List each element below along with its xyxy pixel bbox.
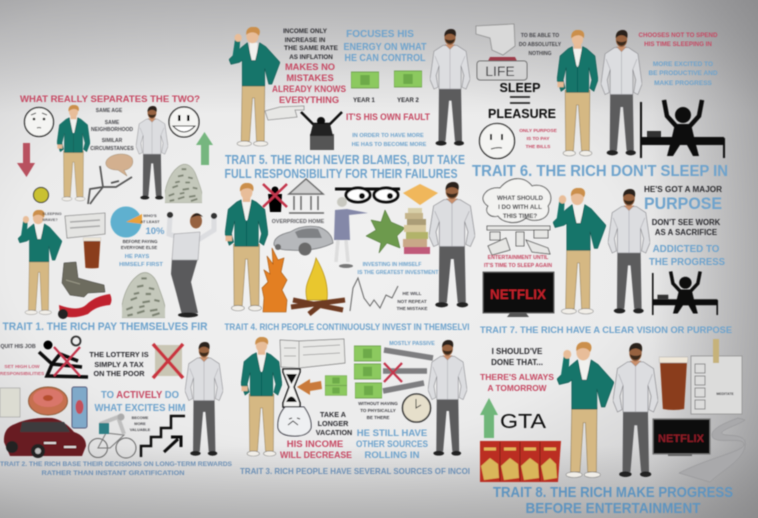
label: overpriced home: OVERPRICED HOME [272, 219, 325, 225]
figure: poor man thinking [557, 342, 614, 478]
text: more excited: BE PRODUCTIVE AND [648, 70, 718, 77]
icon: three bills [354, 346, 382, 398]
text: 10 percent: AT LEAST [140, 219, 160, 224]
heading: trait 4: TRAIT 4. RICH PEOPLE CONTINUOUSLY INVEST IN THEMSELVI [224, 322, 470, 333]
text: without having: BE THERE [367, 415, 389, 420]
text: addicted to the progress: ADDICTED TO [653, 244, 720, 255]
text: sleep equals pleasure [488, 81, 556, 121]
text: there's always a tomorrow: A TOMORROW [488, 383, 547, 393]
text: investing in himself [358, 262, 439, 276]
heading: trait 6: TRAIT 6. THE RICH DON'T SLEEP IN [472, 163, 728, 180]
text: 10 percent: BEFORE PAYING [123, 239, 158, 244]
text: GTA: GTA [500, 411, 547, 433]
icon: green up arrow [196, 132, 213, 165]
text: focuses his energy: FOCUSES HIS [346, 29, 414, 40]
heading: trait 7: TRAIT 7. THE RICH HAVE A CLEAR VISION OR PURPOSE [480, 325, 732, 336]
icon: year 2 bill [394, 71, 422, 87]
icon: arrow to money [297, 379, 322, 395]
text: dont see work [652, 218, 721, 237]
text: take a longer vacation [316, 410, 352, 437]
text: focuses his energy: ENERGY ON WHAT [344, 42, 426, 53]
text: same age and circumstances: NEIGHBORHOOD [91, 127, 133, 133]
text: in order to have more [352, 133, 427, 148]
text: chooses not to spend: CHOOSES NOT TO SPEND [639, 32, 718, 39]
text: 10 percent [119, 213, 165, 268]
caption: sleeping brave: SLEEPING [42, 212, 62, 216]
icon: note paper [0, 388, 20, 417]
icon: red x [384, 363, 402, 382]
panel: trait 2 [0, 336, 233, 477]
icon: grey bars [383, 350, 433, 391]
icon: arrow up stairs [164, 437, 181, 452]
text: in order to have more: HE HAS TO BECOME MORE [352, 142, 427, 148]
text: take a longer vacation: VACATION [316, 428, 352, 437]
text: major purpose [644, 185, 722, 213]
text: addicted to the progress: THE PROGRESS [649, 257, 725, 268]
figure: rich man [428, 340, 467, 456]
figure: poor man [241, 337, 282, 456]
icon: boots [62, 262, 105, 297]
callout: thought cloud: WHAT SHOULD [497, 195, 543, 202]
text: chooses not to spend [639, 32, 718, 48]
heading: trait 8 [493, 484, 733, 517]
figure: rich man cheering [167, 212, 217, 318]
text: there's always a tomorrow [480, 372, 554, 393]
heading: trait 2: RATHER THAN INSTANT GRATIFICATION [42, 470, 185, 477]
text: sleep equals pleasure: PLEASURE [488, 107, 556, 121]
text: makes no mistakes: MAKES NO [285, 62, 335, 72]
icon: audible logo [403, 184, 438, 205]
text: lottery tax: ON THE POOR [93, 369, 145, 378]
icon: paper bills [65, 213, 105, 238]
text: same age and circumstances [90, 108, 134, 152]
figure: rich man [601, 30, 642, 155]
text: same age and circumstances: SIMILAR [102, 138, 123, 144]
text: still have other sources: HE STILL HAVE [357, 428, 427, 439]
text: to be able to do nothing: NOTHING [528, 51, 552, 57]
panel: trait 5 [224, 27, 470, 181]
labels: year 1 and 2 [353, 98, 419, 104]
figure: poor man [225, 183, 268, 311]
icon: alarm clock life: LIFE [485, 63, 515, 79]
icon: alarm clock life [477, 57, 527, 80]
icon: happy face [169, 107, 199, 137]
figure: poor man thinking [553, 188, 606, 314]
text: his income will decrease [280, 439, 352, 461]
text: focuses his energy: HE CAN CONTROL [344, 53, 426, 64]
text: income rate: THE SAME RATE [284, 45, 338, 52]
text: its his own fault: IT'S HIS OWN FAULT [346, 112, 431, 122]
icon: tv netflix: NETFLIX [658, 433, 705, 445]
text: investing in himself: INVESTING IN HIMSELF [363, 262, 421, 268]
figure: poor man thinking [18, 210, 62, 315]
text: 10 percent: HIMSELF FIRST [119, 262, 163, 268]
text: same age and circumstances: CIRCUMSTANCES [90, 146, 134, 152]
text: to actively do: TO ACTIVELY DO [101, 390, 179, 401]
text: focuses his energy [344, 29, 426, 64]
icon: sand pile [286, 374, 297, 402]
text: there's always a tomorrow: THERE'S ALWAYS [480, 372, 554, 382]
icon: chip bags [480, 441, 561, 482]
text: to be able to do nothing: TO BE ABLE TO [521, 33, 559, 39]
heading: trait 3: TRAIT 3. RICH PEOPLE HAVE SEVERAL SOURCES OF INCOI [240, 466, 470, 476]
caption: sleeping brave: BRAVE? [42, 218, 58, 222]
text: without having: WITHOUT HAVING [358, 401, 398, 406]
icon: money pile [165, 164, 202, 203]
text: income rate [283, 28, 338, 61]
figure: poor man thinking [229, 27, 280, 146]
icon: tv netflix: NETFLIX [490, 286, 547, 302]
icon: beer glass [83, 238, 101, 268]
text: in order to have more: IN ORDER TO HAVE MORE [352, 133, 424, 139]
icon: energy drink can [72, 387, 87, 428]
heading: trait 8: BEFORE ENTERTAINMENT [526, 500, 700, 517]
text: without having: TO PHYSICALLY [360, 408, 396, 413]
icon: cyclist [88, 414, 136, 458]
icon: tv netflix [483, 272, 554, 317]
text: more excited: MAKE PROGRESS [654, 80, 713, 87]
panel: what separates the two [17, 94, 213, 204]
text: dont see work: AS A SACRIFICE [655, 228, 717, 237]
text: same age and circumstances: SAME [105, 120, 120, 126]
text: 10 percent: 10% [145, 226, 165, 237]
icon: lottery ticket crossed out [153, 344, 183, 378]
text: lottery tax: SIMPLY A TAX [94, 360, 144, 369]
figure: poor man [57, 105, 90, 201]
caption: sleeping brave [42, 212, 62, 222]
text: 10 percent: EVERYONE ELSE [121, 245, 157, 250]
icon: glasses [335, 188, 400, 202]
text: still have other sources: OTHER SOURCES [356, 439, 428, 450]
heading: trait 5: FULL RESPONSIBILITY FOR THEIR FAILURES [224, 166, 458, 181]
figure: teacher woman [334, 197, 368, 268]
icon: donut [28, 387, 68, 415]
icon: pinned note [691, 339, 742, 414]
icon: chair with red x [39, 336, 88, 377]
text: set high low: SET HIGH LOW [4, 364, 40, 370]
text: take a longer vacation: TAKE A [320, 410, 346, 419]
text: same age and circumstances: SAME AGE [96, 108, 123, 114]
icon: worried face [24, 108, 54, 136]
text: he will not repeat the mistake: HE WILL [403, 291, 422, 296]
heading: trait 5: TRAIT 5. THE RICH NEVER BLAMES, BUT TAKE [225, 152, 465, 167]
icon: red hoverboard [58, 294, 112, 319]
text: he will not repeat the mistake: NOT REPEAT [397, 299, 427, 304]
heading: trait 1: TRAIT 1. THE RICH PAY THEMSELVES FIR [2, 321, 208, 333]
icon: money stack [325, 376, 347, 395]
text: only purpose: ONLY PURPOSE [519, 128, 558, 134]
text: lottery tax [89, 350, 149, 378]
icon: open book [280, 339, 345, 368]
text: major purpose: PURPOSE [644, 195, 722, 213]
text: 10 percent: WHO'S [143, 213, 157, 218]
text: only purpose [519, 128, 558, 150]
text: income rate: INCOME ONLY [283, 28, 328, 35]
icon: yellow ball [34, 188, 48, 202]
text: income rate: AS INFLATION [289, 54, 333, 61]
icon: year 1 bill [351, 72, 379, 88]
text: income rate: INCREASE IN [285, 37, 326, 44]
icon: sad money bag [278, 407, 311, 436]
icon: red down arrow [17, 143, 35, 177]
text: to be able to do nothing: DO ABSOLUTELY [519, 42, 562, 48]
text: major purpose: HE'S GOT A MAJOR [644, 185, 722, 194]
icon: bank building [289, 179, 324, 213]
text: still have other sources [356, 428, 428, 461]
text: without having [358, 401, 398, 420]
icon: money pile [122, 273, 166, 318]
icon: pinned note: MEDITATE [716, 392, 734, 396]
icon: campfire [291, 258, 345, 314]
figure: rich man [613, 343, 658, 477]
icon: pointing hand [265, 106, 304, 120]
text: investing in himself: IS THE GREATEST INVESTMENT [358, 270, 439, 276]
text: set high low [0, 364, 45, 377]
figure: rich man [429, 182, 475, 307]
text: 10 percent: HE PAYS [125, 254, 149, 260]
text: dont see work: DON'T SEE WORK [652, 218, 721, 227]
text: to be able to do nothing [519, 33, 562, 57]
text: he will not repeat the mistake: THE MISTAKE [397, 306, 427, 311]
icon: hourglass [283, 369, 300, 407]
figure: poor man [557, 30, 598, 156]
text: become more valuable: VALUABLE [130, 428, 151, 432]
text: i should've done that [491, 347, 543, 367]
icon: living room [487, 226, 550, 255]
icon: book stack [403, 208, 430, 254]
icon: man at podium [301, 112, 342, 150]
figure: rich man [608, 189, 650, 313]
icon: person on bed [653, 272, 717, 315]
figure: rich man [430, 29, 470, 146]
icon: red car [4, 418, 86, 458]
heading: what really separates the two: WHAT REALLY SEPARATES THE TWO? [20, 94, 200, 105]
text: his income will decrease: WILL DECREASE [280, 450, 352, 461]
icon: hand hitting alarm [476, 24, 515, 55]
text: i should've done that: I SHOULD'VE [492, 347, 543, 356]
text: i should've done that: DONE THAT... [491, 358, 543, 367]
icon: brain [106, 154, 133, 176]
text: become more valuable [130, 416, 151, 432]
text: addicted to the progress [649, 244, 725, 268]
figure: rich man [136, 106, 168, 200]
text: more excited: MORE EXCITED TO [653, 61, 713, 68]
text: still have other sources: ROLLING IN [365, 450, 420, 461]
text: makes no mistakes: ALREADY KNOWS [272, 84, 346, 94]
text: quit his job: QUIT HIS JOB [0, 344, 36, 350]
icon: stairs [141, 416, 185, 457]
icon: person on bed [641, 100, 724, 158]
panel: trait 4 [224, 179, 475, 333]
text: his income will decrease: HIS INCOME [287, 439, 343, 450]
text: entertainment until [484, 255, 552, 269]
callout: thought cloud [483, 179, 551, 222]
text: what excites him: WHAT EXCITES HIM [94, 403, 186, 414]
text: he will not repeat the mistake [397, 291, 427, 311]
text: entertainment until: IT'S TIME TO SLEEP AGAIN [484, 263, 552, 269]
panel: trait 8 [480, 339, 745, 517]
panel: trait 3 [240, 337, 470, 476]
text: become more valuable: BECOME [132, 416, 149, 420]
labels: year 1 and 2: YEAR 1 [353, 98, 375, 104]
text: chooses not to spend: HIS TIME SLEEPING IN [644, 41, 712, 48]
text: only purpose: THE BILLS [526, 144, 551, 150]
text: makes no mistakes [272, 62, 346, 105]
text: more excited [648, 61, 718, 87]
panel: trait 7 [480, 179, 732, 336]
chart: line going up and down [350, 278, 398, 311]
text: entertainment until: ENTERTAINMENT UNTIL [488, 255, 549, 261]
icon: tv netflix [653, 419, 710, 456]
text: lottery tax: THE LOTTERY IS [89, 350, 149, 359]
text: set high low: RESPONSIBILITIES [0, 371, 45, 377]
text: become more valuable: MORE [134, 422, 146, 426]
icon: sad face [480, 124, 514, 158]
heading: trait 2 [0, 461, 233, 477]
labels: year 1 and 2: YEAR 2 [397, 98, 419, 104]
icon: beer glass [659, 357, 688, 410]
icon: green up arrow [480, 398, 498, 438]
text: only purpose: IS TO PAY [527, 136, 550, 142]
icon: silver car [274, 226, 333, 256]
text: makes no mistakes: EVERYTHING [279, 95, 339, 105]
icon: burning tree [262, 248, 287, 312]
icon: winding road [679, 418, 745, 482]
icon: pie chart [110, 206, 142, 238]
figure: rich man [185, 342, 223, 456]
panel: trait 6 [472, 24, 728, 180]
heading: trait 2: TRAIT 2. THE RICH BASE THEIR DECISIONS ON LONG-TERM REWARDS [0, 461, 233, 468]
icon: stick figure [88, 166, 132, 204]
heading: trait 5 [224, 152, 465, 181]
callout: thought cloud: THIS TIME? [503, 213, 537, 220]
text: makes no mistakes: MISTAKES [286, 73, 334, 83]
icon: clock [402, 394, 430, 422]
panel: trait 1 [2, 206, 217, 333]
text: sleep equals pleasure: SLEEP [500, 81, 540, 95]
icon: maple leaf [366, 210, 405, 253]
text: take a longer vacation: LONGER [318, 419, 349, 428]
callout: thought cloud: I DO WITH ALL [498, 204, 542, 211]
icon: red X over figure [263, 184, 287, 212]
text: mostly passive: MOSTLY PASSIVE [389, 341, 435, 347]
